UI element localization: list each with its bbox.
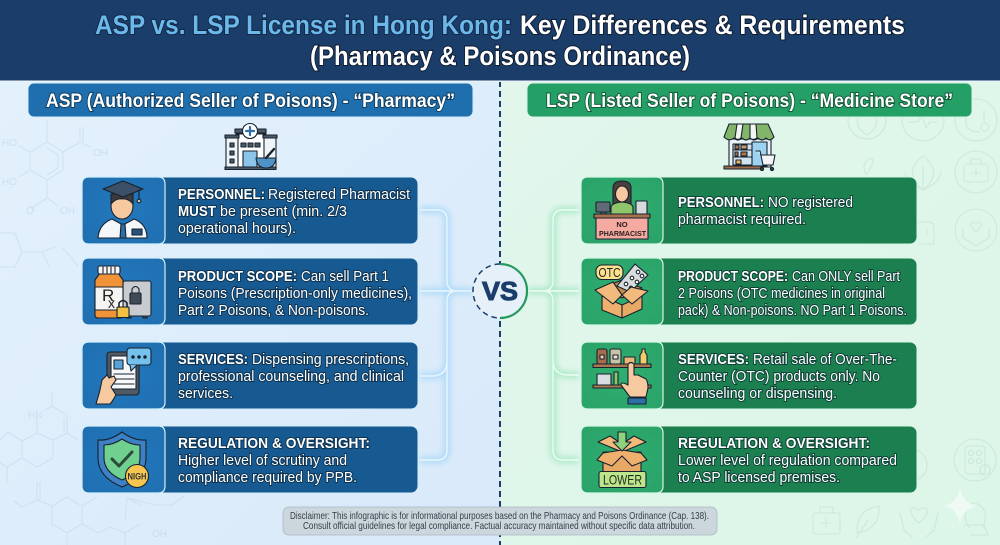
text: ASP services: SERVICES: (178, 351, 248, 368)
background: LSP side (500, 81, 1000, 545)
heading: ASP banner (28, 83, 473, 117)
text: LSP product scope (678, 268, 907, 319)
watermark: molecules (0, 120, 184, 545)
text: LSP services: SERVICES: (678, 351, 749, 368)
text: ASP services: professional counseling, and clinical (178, 368, 404, 385)
text: LSP product scope: 2 Poisons (OTC medicines in original (678, 285, 885, 302)
icon: OTC box: OTC (598, 265, 620, 280)
text: ASP personnel (178, 186, 411, 237)
watermark: molecules: OH (60, 206, 75, 217)
watermark: molecules: OH (152, 529, 167, 540)
text: ASP product scope: PRODUCT SCOPE: (178, 268, 297, 285)
heading: ASP banner: ASP (Authorized Seller of Poisons) - “Pharmacy” (46, 91, 455, 112)
text: LSP services: counseling or dispensing. (678, 385, 837, 402)
panel: ASP regulation (82, 426, 418, 493)
watermark: medical line icons (813, 99, 997, 538)
icon: medicine store (724, 124, 775, 171)
icon: no pharmacist desk: NO (616, 220, 628, 229)
divider (499, 81, 501, 545)
title line 2: (Pharmacy & Poisons Ordinance) (310, 41, 690, 71)
disclaimer box (283, 507, 717, 535)
text: LSP product scope: PRODUCT SCOPE: (678, 268, 788, 285)
title line 1: Key Differences & Requirements (520, 10, 905, 40)
text: ASP regulation: Higher level of scrutiny and (178, 452, 347, 469)
text: LSP personnel: pharmacist required. (678, 211, 806, 228)
text: ASP services (178, 351, 409, 402)
disclaimer box: Consult official guidelines for legal compliance. Factual accuracy maintained without specific data attribution. (303, 520, 695, 532)
icon: Rx bottle and safe: R (102, 286, 114, 305)
watermark: molecules: HN (28, 410, 42, 421)
icon: OTC box (595, 264, 648, 318)
title header (0, 0, 1000, 82)
watermark: molecules: O (26, 206, 34, 217)
icon: high shield: NIGH (128, 472, 146, 482)
text: LSP personnel (678, 194, 853, 228)
panel: ASP services (82, 342, 418, 409)
text: ASP product scope (178, 268, 412, 319)
VS badge: VS (482, 276, 518, 306)
panel: LSP services (581, 342, 917, 409)
icon: no pharmacist desk (594, 181, 650, 239)
heading: LSP banner (527, 83, 972, 117)
text: LSP regulation: REGULATION & OVERSIGHT: (678, 435, 870, 452)
icon: Rx bottle and safe: x (108, 295, 115, 311)
text: LSP personnel: PERSONNEL: (678, 194, 764, 211)
panel: ASP product scope (82, 258, 418, 325)
icon: high shield (98, 432, 148, 488)
icon: lower box: LOWER (603, 472, 642, 488)
title line 1 accent: ASP vs. LSP License in Hong Kong: (95, 10, 512, 40)
text: ASP personnel: operational hours). (178, 220, 296, 237)
panel: ASP personnel (82, 177, 418, 244)
panel: LSP product scope (581, 258, 917, 325)
text: ASP regulation: REGULATION & OVERSIGHT: (178, 435, 370, 452)
text: ASP personnel: MUST (178, 203, 216, 220)
icon: graduate pharmacist (98, 181, 147, 238)
watermark: molecules: HO (2, 177, 17, 188)
text: LSP regulation: to ASP licensed premises. (678, 469, 840, 486)
text: LSP regulation: Lower level of regulation compared (678, 452, 897, 469)
text: LSP services: Retail sale of Over-The- (753, 351, 897, 368)
connector: ASP side (420, 210, 473, 460)
text: ASP product scope: Can sell Part 1 (301, 268, 389, 285)
icon: shelf and pointing hand (593, 349, 651, 404)
text: ASP personnel: Registered Pharmacist (268, 186, 411, 203)
text: ASP regulation: compliance required by PPB. (178, 469, 357, 486)
watermark: molecules: OH (93, 148, 108, 159)
watermark: molecules: HO (2, 138, 17, 149)
text: ASP product scope: Poisons (Prescription-only medicines), (178, 285, 412, 302)
text: LSP product scope: pack) & Non-poisons. NO Part 1 Poisons. (678, 302, 907, 319)
VS badge (473, 264, 527, 318)
text: LSP personnel: NO registered (768, 194, 853, 211)
connector: LSP side (527, 210, 579, 460)
text: LSP services (678, 351, 897, 402)
icon: tablet and hand (96, 348, 151, 404)
text: LSP product scope: Can ONLY sell Part (792, 268, 901, 285)
text: ASP services: services. (178, 385, 233, 402)
text: ASP personnel: be present (min. 2/3 (220, 203, 347, 220)
panel: LSP personnel (581, 177, 917, 244)
icon: Rx bottle and safe (95, 266, 151, 318)
text: LSP services: Counter (OTC) products only. No (678, 368, 880, 385)
sparkle mark (944, 488, 976, 524)
disclaimer box: Disclaimer: This infographic is for informational purposes based on the Pharmacy and Poisons Ordinance (Cap. 138). (290, 510, 709, 522)
icon: lower box (597, 432, 647, 488)
text: ASP personnel: PERSONNEL: (178, 186, 265, 203)
icon: no pharmacist desk: PHARMACIST (599, 229, 646, 238)
background: ASP side (0, 81, 500, 545)
heading: LSP banner: LSP (Listed Seller of Poisons) - “Medicine Store” (546, 91, 953, 112)
text: LSP regulation (678, 435, 897, 486)
text: ASP regulation (178, 435, 370, 486)
icon: pharmacy building (225, 124, 277, 170)
text: ASP product scope: Part 2 Poisons, & Non-poisons. (178, 302, 369, 319)
panel: LSP regulation (581, 426, 917, 493)
text: ASP services: Dispensing prescriptions, (252, 351, 409, 368)
